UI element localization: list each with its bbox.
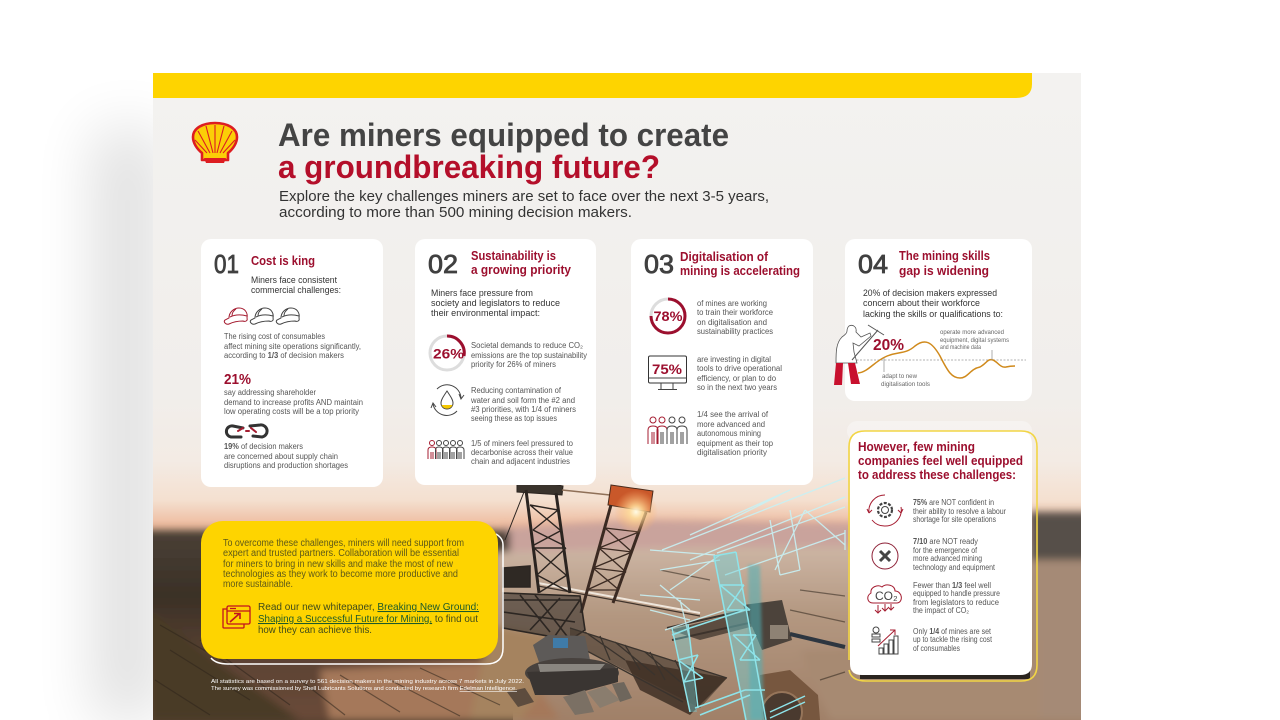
consumables text: The rising cost of consumables: [224, 332, 325, 341]
icon: gear: [867, 495, 903, 526]
heading: companies feel well equipped: [858, 454, 1023, 468]
subtitle: Explore the key challenges miners are set to face over the next 3-5 years,: [279, 188, 769, 205]
CO2 text: priority for 26% of miners: [471, 360, 556, 369]
CO2 text: emissions are the top sustainability: [471, 351, 587, 360]
sun glare: [616, 492, 656, 533]
whitepaper link text: Read our new whitepaper, Breaking New Ground:: [258, 601, 479, 613]
consumables text: up to tackle the rising cost: [913, 635, 993, 644]
investing text: [697, 355, 782, 392]
labour text: shortage for site operations: [913, 515, 996, 524]
decarbonise text: chain and adjacent industries: [471, 457, 570, 466]
consumables text: [224, 332, 361, 360]
support paragraph: more sustainable.: [223, 579, 293, 590]
shareholder text: low operating costs will be a top priority: [224, 407, 359, 416]
heading: sustainability: Sustainability is: [471, 249, 556, 263]
shareholder text: [224, 388, 363, 416]
decarbonise text: 1/5 of miners feel pressured to: [471, 439, 574, 448]
title: [278, 117, 729, 185]
water text: water and soil form the #2 and: [470, 396, 575, 405]
bucket wheel: [760, 670, 820, 720]
heading: skills gap: The mining skills: [899, 249, 990, 263]
investing text: tools to drive operational: [697, 364, 782, 373]
callout: adapt to tools: digitalisation tools: [881, 382, 930, 388]
panel: however few companies: [847, 421, 1037, 681]
CO2 text: [471, 341, 587, 369]
icon: CO2 cloud: [868, 585, 901, 613]
legislators text: equipped to handle pressure: [913, 589, 1000, 598]
yellow header bar: [153, 73, 1032, 98]
legislators text: the impact of CO₂: [913, 606, 969, 615]
photo ground streaks: [155, 570, 845, 716]
autonomous text: digitalisation priority: [697, 448, 767, 457]
icon: five people: [428, 440, 464, 459]
autonomous text: more advanced and: [697, 420, 765, 429]
training text: sustainability practices: [697, 327, 773, 336]
intro text: commercial challenges:: [251, 285, 341, 295]
white offset outline: [211, 534, 503, 664]
poster drop shadow: [95, 130, 160, 720]
intro text: lacking the skills or qualifications to:: [863, 309, 1003, 319]
digital wireframe overlay: [640, 478, 845, 640]
icon: rising cost chart: [872, 627, 898, 654]
heading: skills gap: [899, 249, 990, 278]
heading: digitalisation: mining is accelerating: [680, 264, 800, 278]
shareholder text: say addressing shareholder: [224, 388, 316, 397]
footnote: The survey was commissioned by Shell Lubricants Solutions and conducted by research firm Edelman Intelligence.: [211, 686, 517, 692]
subtitle: [279, 188, 769, 221]
Shell logo: [193, 123, 237, 163]
labour text: their ability to resolve a labour: [913, 507, 1006, 516]
distant machine and conveyor: [743, 600, 845, 650]
icon: cross circle: [872, 543, 898, 569]
donut: 78%: 78%: [654, 308, 683, 324]
heading: However, few mining: [858, 440, 975, 454]
number 02: 02: [428, 249, 458, 279]
subtitle: according to more than 500 mining decision makers.: [279, 204, 632, 221]
stat: 20%: 20%: [873, 337, 904, 354]
boom lattice: [570, 609, 752, 715]
supply chain text: are concerned about supply chain: [224, 452, 338, 461]
intro text: 20% of decision makers expressed: [863, 288, 997, 298]
supply chain text: [224, 442, 348, 470]
footnote: All statistics are based on a survey to 561 decision makers in the mining industry across 7 markets in July 2022.: [211, 679, 524, 685]
sky and pale background: [153, 73, 1081, 535]
intro text: concern about their workforce: [863, 298, 980, 308]
intro text: [431, 288, 560, 318]
consumables text: [913, 627, 993, 653]
intro text: Miners face consistent: [251, 275, 338, 285]
support paragraph: To overcome these challenges, miners will need support from: [223, 538, 464, 549]
investing text: so in the next two years: [697, 383, 777, 392]
intro text: [251, 275, 341, 295]
legislators text: Fewer than 1/3 feel well: [913, 581, 991, 590]
bucket wheel excavator: [503, 477, 845, 720]
photo ground base: [153, 714, 1081, 720]
readiness text: [913, 537, 996, 572]
callout: operate equipment: operate more advanced: [940, 330, 1004, 336]
footnote: [211, 679, 524, 692]
panel: 04 skills gap: [834, 239, 1032, 401]
number 04: 04: [858, 249, 888, 279]
panel: 03 digitalisation: [631, 239, 813, 485]
heading: digitalisation: [680, 250, 800, 278]
number 03: 03: [644, 249, 674, 279]
autonomous text: 1/4 see the arrival of: [697, 410, 769, 419]
intro text: society and legislators to reduce: [431, 298, 560, 308]
poster background with mining photograph: [130, 73, 1100, 720]
callout: adapt to tools: adapt to new: [882, 374, 918, 380]
legislators text: from legislators to reduce: [913, 598, 1000, 607]
yellow outline: [849, 431, 1037, 681]
support paragraph: technologies as they work to become more productive and: [223, 569, 458, 580]
training text: [697, 299, 774, 336]
turret: [507, 635, 632, 715]
water text: Reducing contamination of: [471, 386, 562, 395]
heading: sustainability: [471, 249, 571, 277]
water text: [470, 386, 576, 423]
callout: operate equipment: and machine data: [940, 345, 982, 351]
white inner card: [850, 431, 1032, 675]
consumables text: according to 1/3 of decision makers: [224, 351, 344, 360]
wireframe columns: [672, 552, 805, 720]
consumables text: of consumables: [913, 644, 960, 653]
callout: operate equipment: equipment, digital systems: [940, 338, 1009, 344]
photo ground: [130, 512, 1100, 720]
stat: 21%: 21%: [224, 371, 251, 388]
readiness text: technology and equipment: [913, 563, 996, 572]
heading: skills gap: gap is widening: [899, 264, 989, 278]
autonomous text: autonomous mining: [697, 429, 761, 438]
support paragraph: for miners to bring in new skills and make the most of new: [223, 559, 454, 570]
pale road line: [538, 583, 700, 613]
panel: 01 cost is king: [201, 239, 383, 487]
skills curve: [858, 342, 1015, 378]
consumables text: affect mining site operations significantly,: [224, 342, 361, 351]
panel: yellow call to action: [201, 521, 503, 664]
heading: to address these challenges:: [858, 468, 1016, 482]
labour text: 75% are NOT confident in: [913, 498, 994, 507]
icon: broken chain: [226, 425, 267, 437]
water text: #3 priorities, with 1/4 of miners: [471, 405, 576, 414]
dashed reference line: [853, 359, 1026, 361]
whitepaper link text: how they can achieve this.: [258, 624, 372, 636]
shareholder text: demand to increase profits AND maintain: [224, 398, 363, 407]
supply chain text: disruptions and production shortages: [224, 461, 348, 470]
intro text: [863, 288, 1003, 319]
icon: monitor 75%: 75%: [652, 361, 683, 377]
readiness text: for the emergence of: [913, 546, 978, 555]
title line 1: Are miners equipped to create: [278, 117, 729, 153]
donut: 26%: [430, 336, 465, 370]
donut: 78%: [651, 299, 685, 333]
icon: three helmets: [224, 308, 299, 324]
water text: seeing these as top issues: [471, 414, 557, 423]
autonomous text: equipment as their top: [697, 439, 774, 448]
investing text: are investing in digital: [697, 355, 771, 364]
dark bottom edge: [860, 670, 1030, 679]
miner figure: [834, 325, 884, 385]
labour text: [913, 498, 1006, 524]
icon: water drop cycle: [431, 385, 464, 415]
whitepaper link text: [258, 601, 479, 636]
support paragraph: [223, 538, 464, 590]
training text: on digitalisation and: [697, 318, 767, 327]
consumables text: Only 1/4 of mines are set: [913, 627, 992, 636]
donut: 26%: 26%: [433, 346, 465, 362]
readiness text: 7/10 are NOT ready: [913, 537, 978, 546]
readiness text: more advanced mining: [913, 554, 982, 563]
icon: four people: [648, 417, 687, 444]
investing text: efficiency, or plan to do: [697, 374, 777, 383]
intro text: their environmental impact:: [431, 308, 540, 318]
icon: CO2 cloud: CO₂: [875, 589, 898, 603]
heading: cost is king: Cost is king: [251, 254, 315, 268]
autonomous text: [697, 410, 774, 457]
training text: to train their workforce: [697, 308, 774, 317]
number 01: 01: [214, 249, 239, 279]
heading: sustainability: a growing priority: [471, 263, 571, 277]
support paragraph: expert and trusted partners. Collaboration will be essential: [223, 548, 459, 559]
heading: digitalisation: Digitalisation of: [680, 250, 769, 264]
title line 2: a groundbreaking future?: [278, 149, 660, 185]
decarbonise text: decarbonise across their value: [471, 448, 574, 457]
legislators text: [913, 581, 1000, 615]
icon: monitor 75%: [648, 356, 686, 390]
intro text: Miners face pressure from: [431, 288, 533, 298]
decarbonise text: [471, 439, 574, 466]
callout: adapt to tools: [881, 358, 930, 388]
supply chain text: 19% of decision makers: [224, 442, 303, 451]
training text: of mines are working: [697, 299, 767, 308]
tower right with orange panel: [581, 485, 653, 613]
tower left: [505, 477, 610, 593]
truss body: [503, 566, 585, 640]
faint card top: [847, 421, 1032, 441]
icon: browser windows: [223, 606, 250, 628]
yellow box: [201, 521, 498, 659]
panel: 02 sustainability: [415, 239, 596, 485]
heading: [858, 440, 1023, 482]
CO2 text: Societal demands to reduce CO₂: [471, 341, 583, 350]
whitepaper link text: Shaping a Successful Future for Mining, to find out: [258, 613, 478, 625]
callout: operate equipment: [940, 330, 1009, 360]
